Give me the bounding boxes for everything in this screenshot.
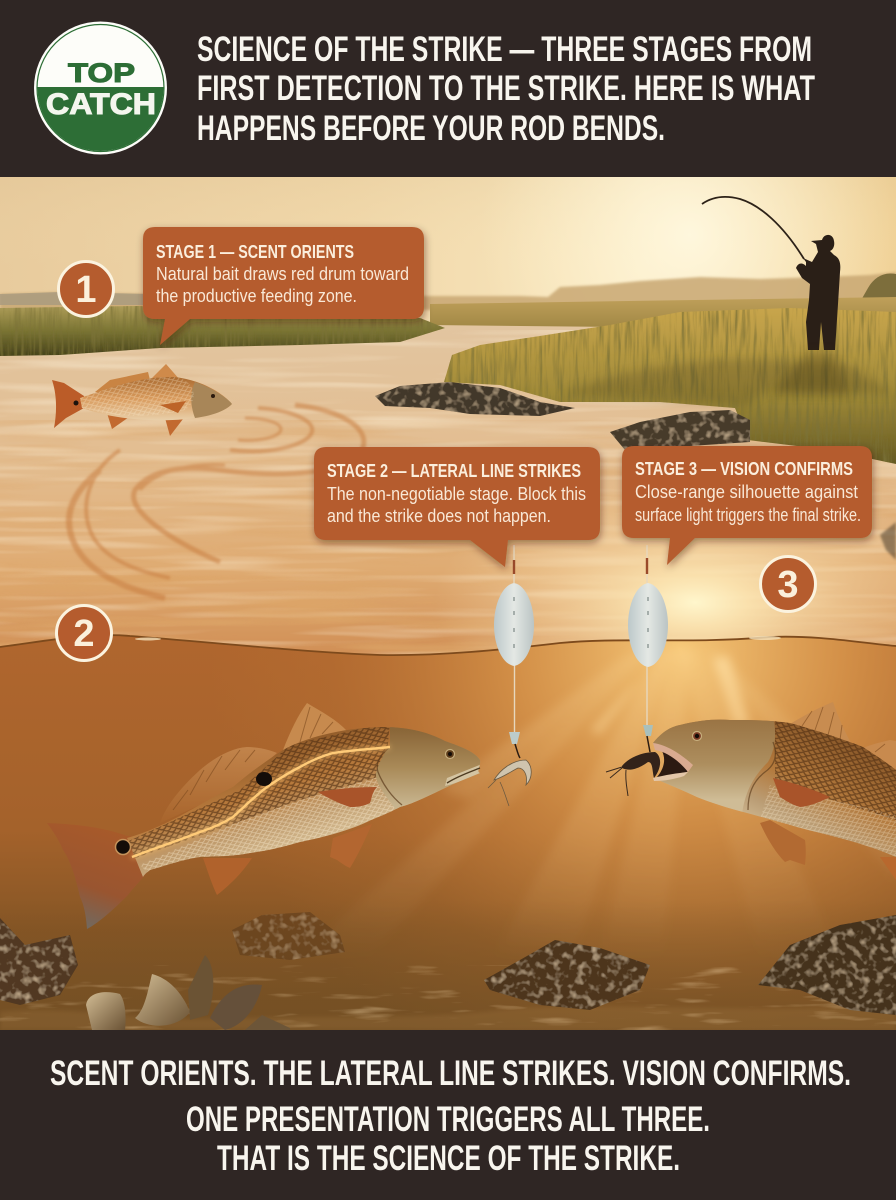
surface foam	[135, 636, 781, 640]
stage 1 callout: Natural bait draws red drum toward	[156, 264, 409, 284]
number badge 2: 2	[73, 613, 95, 655]
far marsh	[430, 297, 896, 350]
number badge 2	[56, 606, 112, 660]
red drum taking bait (stage 3)	[640, 702, 896, 880]
waterline	[0, 635, 896, 655]
stage 2 callout: and the strike does not happen.	[327, 506, 551, 526]
heading	[197, 30, 815, 148]
shadow in grass	[560, 359, 896, 405]
number badge 3: 3	[777, 564, 799, 606]
water surface	[0, 325, 896, 665]
stage 2 callout: STAGE 2 — LATERAL LINE STRIKES	[327, 460, 581, 481]
logo: Top Catch: TOP	[68, 58, 135, 88]
number badge 1: 1	[75, 269, 97, 311]
sun rays	[405, 652, 787, 880]
right marsh grass	[444, 308, 896, 464]
float rig stage 2 with shrimp	[488, 545, 534, 806]
header band	[34, 22, 815, 154]
heading: HAPPENS BEFORE YOUR ROD BENDS.	[197, 109, 665, 148]
panel: sunset marsh scene above water	[0, 177, 896, 665]
stage 1 callout: STAGE 1 — SCENT ORIENTS	[156, 241, 354, 262]
sea floor	[0, 965, 896, 1030]
stage 1 callout	[143, 227, 424, 345]
stage 3 callout	[622, 446, 872, 565]
underwater gradient	[0, 630, 896, 1030]
sky	[0, 177, 896, 337]
stage 3 callout: Close-range silhouette against	[635, 482, 858, 502]
footer band: THAT IS THE SCIENCE OF THE STRIKE.	[217, 1139, 680, 1178]
stage 2 callout: The non-negotiable stage. Block this	[327, 484, 586, 504]
logo: Top Catch	[34, 22, 167, 154]
red drum with glowing lateral line (stage 2)	[47, 703, 500, 929]
footer band	[0, 1030, 896, 1200]
angler silhouette	[702, 197, 850, 395]
number badge 1	[58, 262, 114, 316]
logo: Top Catch: CATCH	[46, 88, 156, 121]
left marsh	[0, 306, 445, 356]
foreground ripples around small fish	[69, 405, 364, 598]
float rig stage 3 with dark shrimp	[606, 545, 668, 796]
oyster clusters	[0, 912, 896, 1030]
panel: underwater scene	[0, 545, 896, 1030]
small red drum (stage 1)	[52, 364, 232, 436]
stage 2 callout	[314, 447, 600, 567]
number badge 3	[760, 556, 816, 612]
oyster bank	[375, 382, 896, 560]
distant treeline	[0, 272, 896, 310]
stage 1 callout: the productive feeding zone.	[156, 286, 357, 306]
